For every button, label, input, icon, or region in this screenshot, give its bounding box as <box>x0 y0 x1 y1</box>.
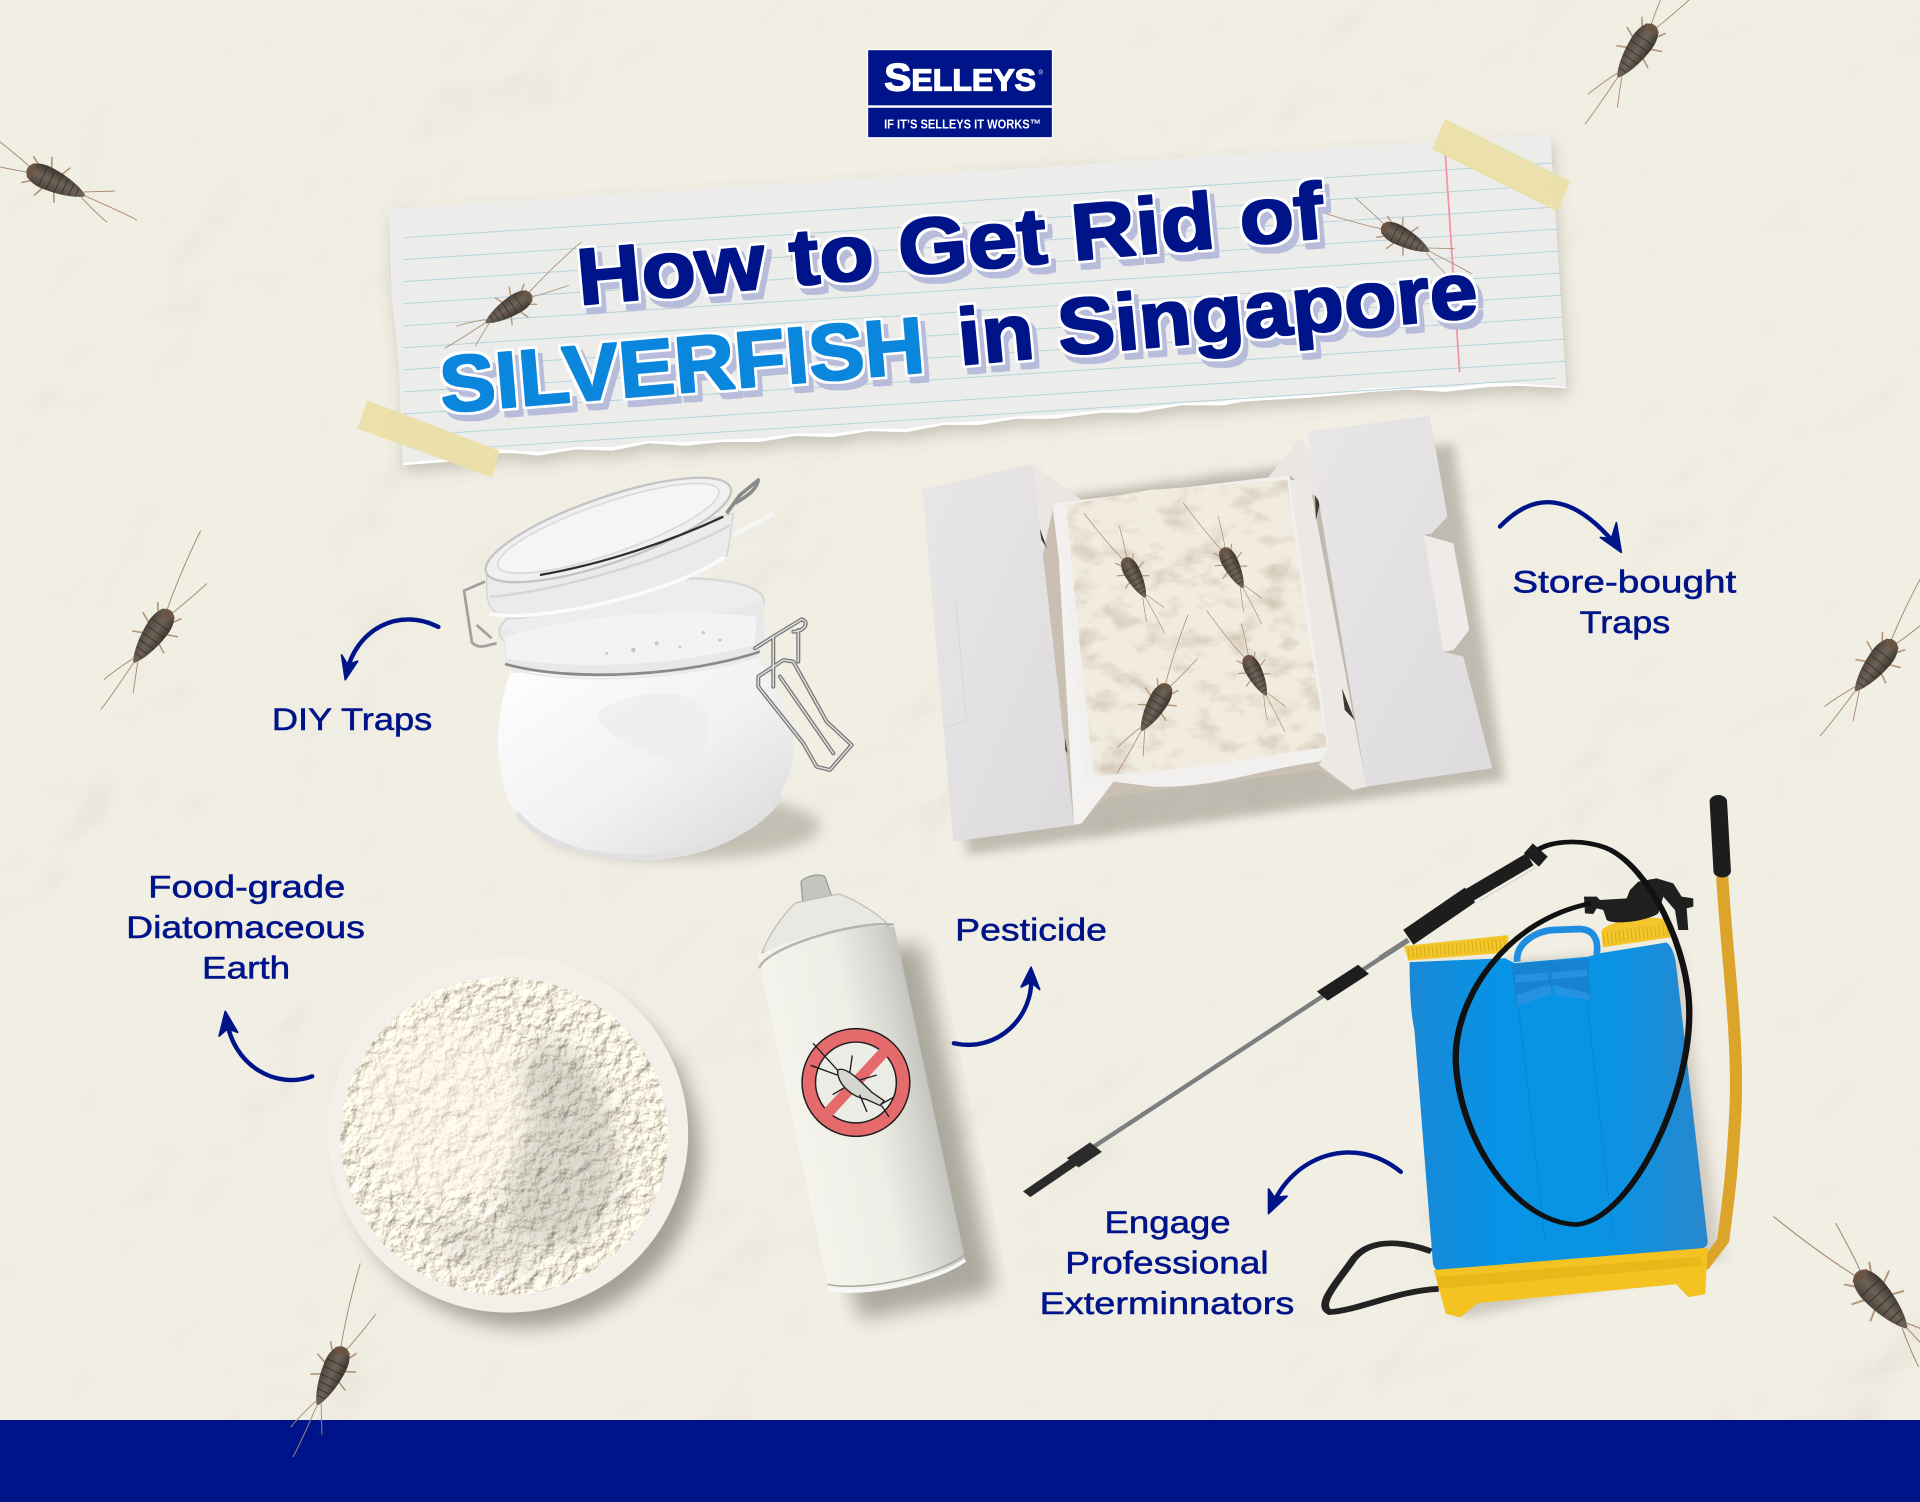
ruled lines <box>404 163 1565 447</box>
logo: Selleys: SELLEYS <box>884 57 1036 100</box>
product: store-bought trap box <box>923 416 1505 855</box>
dark slits <box>1039 495 1355 753</box>
sprayer shadow <box>1427 951 1722 1319</box>
prohibition silverfish sign <box>802 1029 910 1136</box>
right clamp <box>755 619 852 770</box>
neck speckles <box>605 631 722 655</box>
fold top right <box>1268 437 1319 500</box>
right cap <box>1602 918 1671 947</box>
label: Food-grade Diatomaceous Earth: Food-grade <box>148 869 345 905</box>
powder at neck <box>505 613 757 665</box>
silverfish: bottom left <box>274 1264 398 1465</box>
lid seal curve <box>489 557 725 616</box>
yellow base <box>1434 1248 1708 1317</box>
bowl shadow <box>348 980 700 1327</box>
bottom rim <box>829 1260 968 1300</box>
fold bottom right <box>1289 480 1366 790</box>
dark base <box>1034 483 1351 823</box>
tray inner white <box>1052 475 1335 787</box>
nozzle <box>1027 1148 1095 1194</box>
label: Engage Professional Exterminnators: Professional <box>1065 1244 1269 1280</box>
logo: Selleys: ® <box>1038 70 1043 77</box>
title text <box>436 166 1481 430</box>
fold top left <box>1032 464 1082 557</box>
arrow: to DIY Traps <box>342 619 438 680</box>
neck <box>502 600 765 677</box>
wand <box>1092 941 1407 1148</box>
label: Store-bought Traps <box>1512 564 1737 640</box>
label: Engage Professional Exterminnators: Engage <box>1104 1204 1231 1240</box>
arrow: to Store-bought Traps <box>1500 502 1621 552</box>
tape: top right <box>1433 119 1570 212</box>
powder highlight <box>361 1016 533 1200</box>
lid underside <box>487 513 733 619</box>
product: aerosol spray can <box>743 861 996 1320</box>
product: backpack sprayer <box>1027 801 1736 1319</box>
bait pad <box>1066 480 1327 777</box>
label: Store-bought Traps: Traps <box>1580 604 1670 640</box>
title text: How to Get Rid of <box>573 166 1328 322</box>
panel: torn notebook paper title <box>358 119 1570 478</box>
jar body <box>498 657 793 860</box>
bowl rim <box>328 955 688 1313</box>
product: bowl of diatomaceous earth <box>328 955 700 1327</box>
shoulder strap <box>1325 1243 1439 1312</box>
wand top section <box>1380 940 1408 958</box>
logo: Selleys <box>867 49 1053 138</box>
paper torn fringe <box>389 135 1566 465</box>
top handle <box>727 480 758 513</box>
seal tab <box>733 513 773 535</box>
top rim <box>755 919 897 968</box>
right flap <box>1307 416 1492 787</box>
arrow: to Food-grade Diatomaceous Earth <box>219 1011 312 1080</box>
silverfish: bottom right <box>1774 1184 1920 1394</box>
carry handle <box>1517 929 1597 962</box>
label: Food-grade Diatomaceous Earth <box>126 869 365 985</box>
powder <box>340 977 669 1296</box>
fold bottom left <box>1056 510 1113 825</box>
hose coupling <box>1528 848 1543 862</box>
label: DIY Traps: DIY Traps <box>272 701 432 737</box>
tank <box>1410 942 1708 1271</box>
tank emboss <box>1512 958 1591 1007</box>
tank panel lines <box>1519 998 1613 1241</box>
label: Engage Professional Exterminnators <box>1040 1204 1294 1321</box>
jar back rim <box>495 566 768 668</box>
yellow rod <box>1703 876 1736 1267</box>
arrow: to Pesticide <box>954 967 1040 1045</box>
silverfish on paper right <box>1312 178 1480 290</box>
product: glass jar of powder <box>464 457 852 860</box>
glass base <box>517 797 780 857</box>
trigger upper body <box>1467 859 1530 897</box>
box shadow <box>940 443 1505 855</box>
silverfish: right middle <box>1804 563 1920 749</box>
silverfish: top left <box>0 115 145 239</box>
left flap <box>923 464 1074 842</box>
powder patch <box>597 693 709 767</box>
logo: Selleys: IF IT’S SELLEYS IT WORKS™ <box>884 117 1041 132</box>
silverfish in trap 4 <box>1207 597 1298 738</box>
label: Engage Professional Exterminnators: Exterminnators <box>1040 1285 1294 1321</box>
title text: in Singapore <box>953 245 1481 382</box>
lid glass <box>475 457 741 603</box>
silverfish on paper left <box>435 242 600 363</box>
can <box>743 861 968 1300</box>
silverfish: top right <box>1568 0 1719 136</box>
title text: SILVERFISH <box>436 300 928 430</box>
label: Food-grade Diatomaceous Earth: Diatomaceous <box>126 909 365 945</box>
red margin line <box>1445 147 1460 372</box>
jar shadow <box>540 793 820 860</box>
label: Store-bought Traps: Store-bought <box>1512 564 1737 600</box>
arrow: to Engage Professional Exterminators <box>1269 1152 1401 1213</box>
tape: bottom left <box>358 400 500 478</box>
powder shading <box>429 1041 618 1273</box>
label: Food-grade Diatomaceous Earth: Earth <box>202 949 290 985</box>
dome <box>754 885 889 953</box>
lid wire <box>540 517 723 575</box>
label: Pesticide: Pesticide <box>955 911 1107 947</box>
silverfish in trap 2 <box>1183 489 1275 630</box>
nozzle <box>798 873 831 902</box>
silverfish in trap 1 <box>1084 500 1177 640</box>
trigger highlight <box>1480 867 1537 901</box>
paper sheet <box>389 135 1566 463</box>
body <box>756 918 968 1300</box>
wand joint <box>1322 969 1364 996</box>
trigger lower body <box>1408 895 1470 937</box>
hose <box>1456 842 1689 1225</box>
black grip <box>1718 801 1722 871</box>
footer bar <box>0 1420 1920 1502</box>
silverfish: left middle <box>84 531 235 721</box>
pump head <box>1584 878 1693 930</box>
left cap <box>1404 935 1508 961</box>
left hinge <box>464 582 497 647</box>
can shadow <box>784 941 996 1320</box>
metal ring <box>505 652 760 675</box>
silverfish in trap 3 <box>1102 615 1218 781</box>
